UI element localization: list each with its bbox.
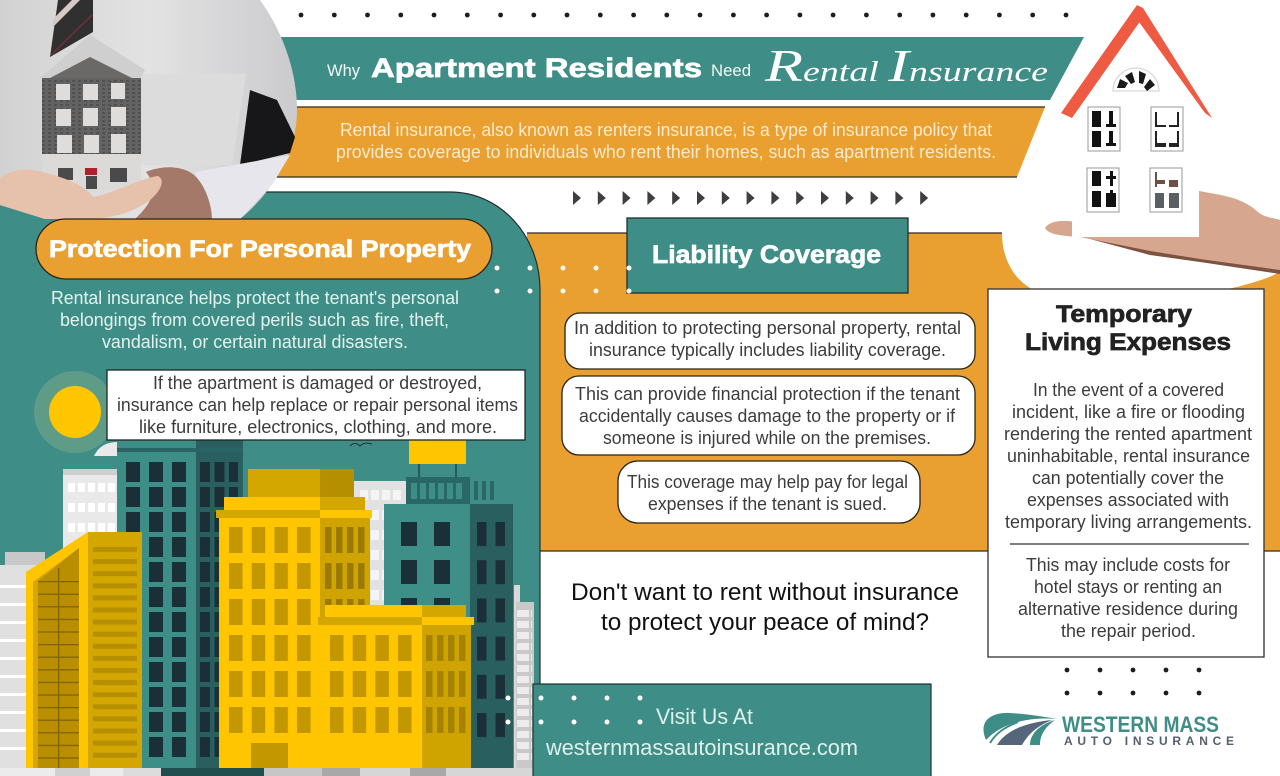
pill: liability text three: This coverage may help pay for legal [627, 472, 908, 492]
text: hotel stays: the repair period. [1061, 621, 1196, 641]
cuff [195, 155, 290, 219]
pill: liability text one: In addition to protecting personal property, rental [574, 318, 961, 338]
text: hotel stays: alternative residence during [1018, 599, 1238, 619]
white building [63, 469, 119, 579]
house body [1072, 12, 1199, 237]
pill: liability text one: insurance typically includes liability coverage. [589, 340, 946, 360]
callout: damaged apartment: If the apartment is damaged or destroyed, [153, 373, 482, 393]
panel: liability background [527, 233, 1280, 551]
logo: western mass auto insurance: WESTERN MASS [1062, 712, 1219, 737]
heading: temporary living expenses: Temporary [1056, 301, 1193, 328]
text: personal property intro: belongings from covered perils such as fire, theft, [60, 310, 449, 330]
intro text: provides coverage to individuals who rent their homes, such as apartment residents. [336, 142, 996, 162]
intro band [270, 107, 1045, 177]
yellow central building [216, 469, 372, 768]
far left grey buildings [0, 552, 45, 769]
pill: liability text two [562, 376, 975, 455]
hand: right [135, 167, 212, 219]
divider lines on liability panel [527, 233, 1280, 551]
pill: liability text one [565, 313, 975, 369]
logo: western mass auto insurance: AUTO INSURANCE [1064, 734, 1234, 748]
photo: hand holding white house [1045, 5, 1280, 274]
panel: personal property background [0, 192, 540, 776]
panel: temporary living expenses [988, 289, 1264, 657]
illustration: city buildings [0, 371, 534, 776]
callout: damaged apartment [107, 370, 525, 440]
text: covered incident: rendering the rented apartment [1004, 424, 1252, 444]
dots: white over panels [494, 266, 632, 294]
call to action: Don't want to rent without insurance [571, 579, 959, 606]
logo road icon [983, 713, 1058, 745]
call to action: to protect your peace of mind? [601, 609, 929, 636]
dots: black lower right [1065, 668, 1201, 695]
yellow lower building [318, 605, 474, 769]
text: hotel stays: This may include costs for [1026, 555, 1230, 575]
callout: damaged apartment: like furniture, electronics, clothing, and more. [139, 417, 497, 437]
pocket [140, 74, 246, 165]
text: personal property intro: vandalism, or certain natural disasters. [102, 332, 408, 352]
text: personal property intro: Rental insurance helps protect the tenant's personal [51, 288, 459, 308]
hand [1045, 190, 1280, 270]
heading: liability coverage [627, 218, 908, 293]
pill: liability text two: someone is injured while on the premises. [603, 428, 931, 448]
text: covered incident: expenses associated with [1027, 490, 1229, 510]
tie [50, 0, 93, 57]
visit text [545, 704, 858, 760]
call to action [571, 579, 959, 636]
hand: left [0, 170, 162, 219]
title text: Apartment Residents [371, 53, 702, 83]
pill: liability text three [618, 461, 920, 523]
cloud [94, 442, 118, 456]
right teal building [384, 440, 513, 769]
bird [350, 443, 372, 446]
intro text [336, 120, 996, 162]
right edge building [514, 585, 534, 768]
pill: liability text three: expenses if the tenant is sued. [648, 494, 887, 514]
title text [327, 40, 1048, 91]
visit text: westernmassautoinsurance.com [545, 735, 858, 760]
rooftop billboard [406, 440, 494, 504]
hand underside shadow [1075, 235, 1280, 274]
text: covered incident: In the event of a covered [1033, 380, 1224, 400]
text: covered incident: temporary living arrangements. [1005, 512, 1252, 532]
windows [1087, 107, 1183, 212]
photo: hands holding model house [0, 0, 297, 219]
street strip [0, 768, 533, 776]
white building behind yellow [354, 481, 406, 621]
heading: protection for personal property: Protection For Personal Property [49, 236, 472, 263]
text: covered incident: incident, like a fire or flooding [1012, 402, 1245, 422]
text: covered incident: can potentially cover the [1032, 468, 1224, 488]
pill: liability text two: This can provide financial protection if the tenant [575, 384, 960, 404]
visit text: Visit Us At [656, 704, 753, 729]
arrow row [573, 191, 928, 205]
text: hotel stays: hotel stays or renting an [1034, 577, 1222, 597]
yellow wedge building [26, 532, 142, 768]
intro text: Rental insurance, also known as renters insurance, is a type of insurance policy that [340, 120, 992, 140]
title text: Why [327, 61, 360, 80]
heading: protection for personal property [36, 219, 492, 279]
sun [34, 371, 116, 453]
heading: liability coverage: Liability Coverage [652, 241, 881, 269]
title text: Need [711, 61, 751, 80]
dotted row: top [299, 13, 1068, 17]
heading: temporary living expenses [1025, 301, 1231, 356]
teal tower [117, 440, 243, 769]
attic vent [1113, 68, 1159, 91]
callout: damaged apartment: insurance can help replace or repair personal items [117, 395, 518, 415]
model house [40, 35, 145, 190]
pill: liability text two: accidentally causes damage to the property or if [579, 406, 956, 426]
title banner [270, 37, 1084, 100]
logo: western mass auto insurance [983, 712, 1234, 748]
black undershirt [240, 90, 295, 165]
title text: R ental Insurance [764, 40, 1048, 91]
text: hotel stays [1018, 555, 1238, 641]
text: covered incident [1004, 380, 1252, 532]
panel: visit us [506, 684, 931, 776]
roof [1061, 5, 1212, 118]
heading: temporary living expenses: Living Expenses [1025, 329, 1231, 356]
text: covered incident: uninhabitable, rental insurance [1007, 446, 1250, 466]
dots: white on visit panel [506, 696, 642, 724]
text: personal property intro [51, 288, 459, 352]
